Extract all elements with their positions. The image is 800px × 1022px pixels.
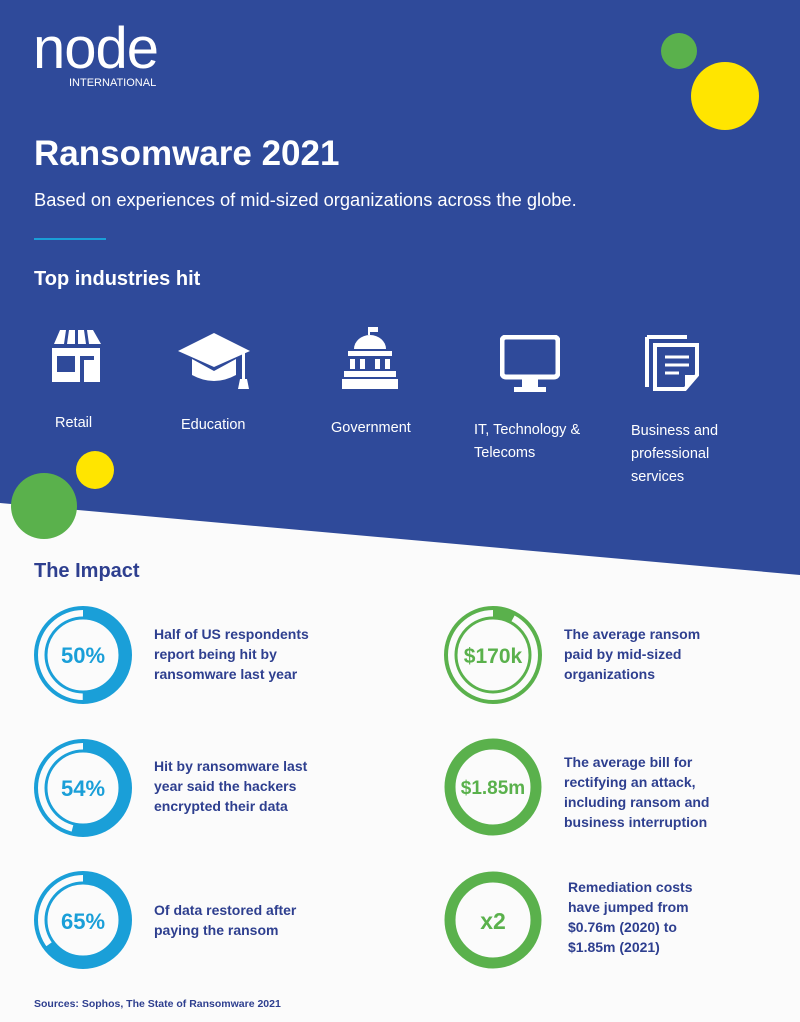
stat text 170k	[564, 626, 700, 682]
icon: retail	[52, 330, 101, 382]
label: IT: Telecoms	[474, 445, 535, 461]
stat text x2: have jumped from	[568, 899, 689, 915]
label: retail: Retail	[55, 415, 92, 431]
sources: Sources: Sophos, The State of Ransomware 2021	[34, 998, 281, 1010]
label: business: services	[631, 469, 684, 485]
stat text 170k: organizations	[564, 666, 655, 682]
stat text x2: $1.85m (2021)	[568, 939, 660, 955]
icon: government	[342, 327, 398, 389]
stat text 65%	[154, 902, 296, 938]
stat text 50%: Half of US respondents	[154, 626, 309, 642]
logo: INTERNATIONAL	[69, 77, 156, 89]
stat text 1.85m: business interruption	[564, 814, 707, 830]
stat text 170k: The average ransom	[564, 626, 700, 642]
rings chart: $170k	[464, 645, 523, 668]
icon: monitor	[500, 335, 560, 392]
stat text 1.85m	[564, 754, 709, 830]
stat text 1.85m: rectifying an attack,	[564, 774, 696, 790]
label: business	[631, 423, 718, 485]
title: Ransomware 2021	[34, 134, 339, 173]
label: business: Business and	[631, 423, 718, 439]
rings chart: 50%	[61, 643, 105, 668]
stat text 54%	[154, 758, 308, 814]
icon: documents	[645, 335, 699, 391]
stat text 1.85m: The average bill for	[564, 754, 692, 770]
label: government: Government	[331, 420, 411, 436]
label: education: Education	[181, 417, 246, 433]
stat text 1.85m: including ransom and	[564, 794, 709, 810]
stat text 65%: paying the ransom	[154, 922, 278, 938]
logo: node	[33, 16, 158, 81]
icon: education	[178, 333, 250, 389]
heading: the impact: The Impact	[34, 560, 140, 582]
stat text 54%: year said the hackers	[154, 778, 296, 794]
subtitle: Based on experiences of mid-sized organizations across the globe.	[34, 189, 577, 210]
rings chart: x2	[480, 908, 506, 934]
label: IT	[474, 422, 580, 461]
stat text 54%: Hit by ransomware last	[154, 758, 307, 774]
rings chart: $1.85m	[461, 778, 525, 799]
stat text 50%: ransomware last year	[154, 666, 297, 682]
rings chart: 65%	[61, 909, 105, 934]
stat text 170k: paid by mid-sized	[564, 646, 681, 662]
stat text 50%: report being hit by	[154, 646, 277, 662]
stat text x2	[568, 879, 692, 955]
stat text 50%	[154, 626, 309, 682]
rings chart: 54%	[61, 776, 105, 801]
stat text x2: $0.76m (2020) to	[568, 919, 677, 935]
stat text 54%: encrypted their data	[154, 798, 288, 814]
heading: top industries: Top industries hit	[34, 268, 200, 290]
label: IT: IT, Technology &	[474, 422, 580, 438]
label: business: professional	[631, 446, 709, 462]
stat text x2: Remediation costs	[568, 879, 692, 895]
stat text 65%: Of data restored after	[154, 902, 296, 918]
